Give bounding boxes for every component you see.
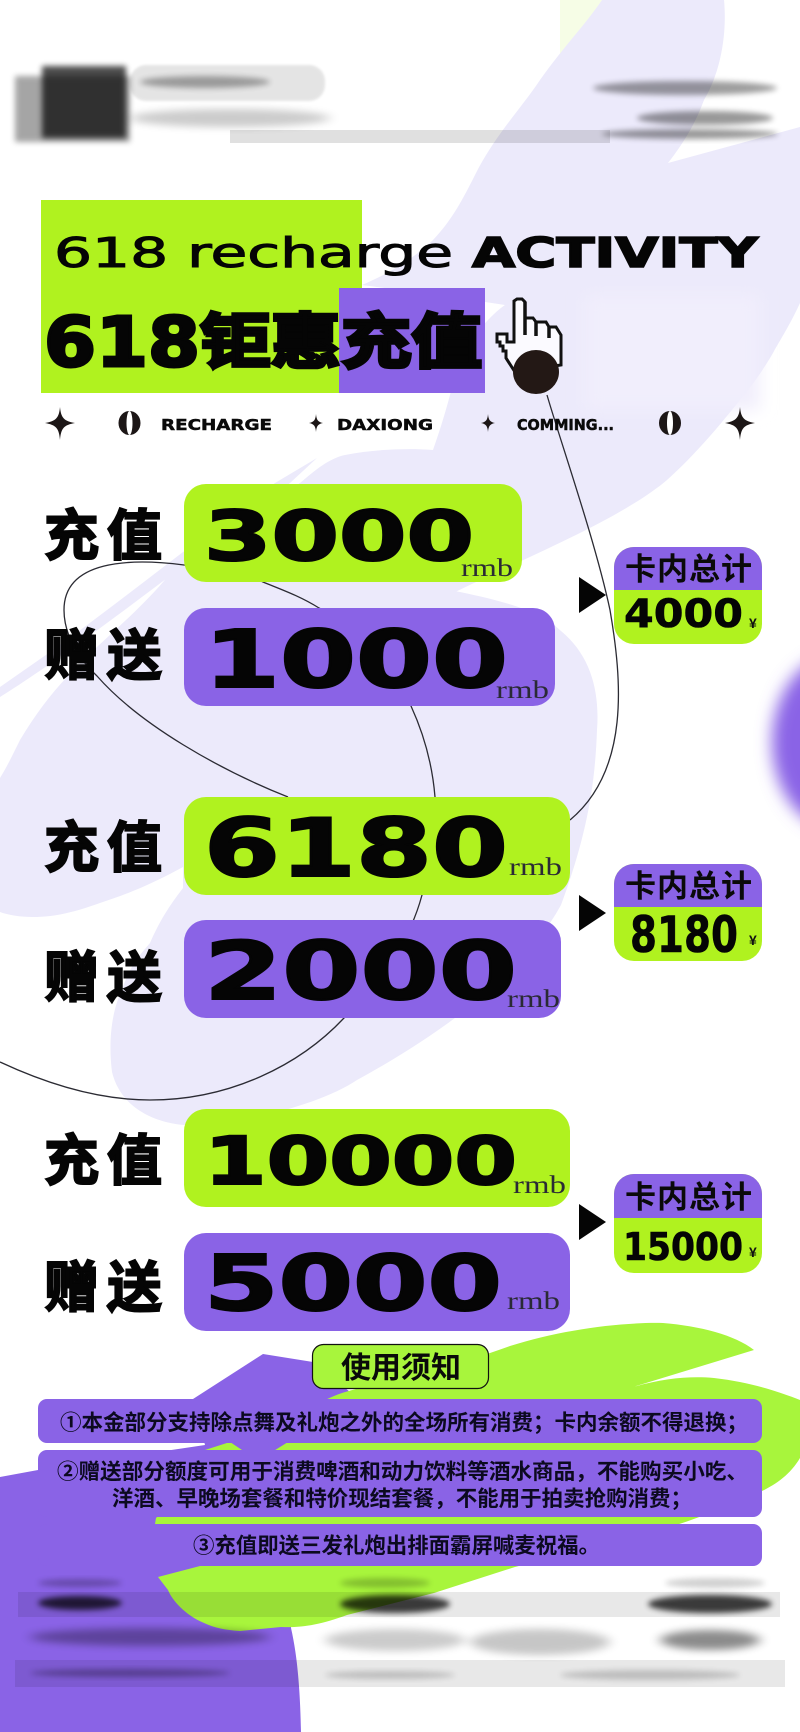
arrow 1 xyxy=(579,577,606,613)
row 3: recharge 6180 xyxy=(44,797,570,895)
unit: rmb xyxy=(507,1288,560,1315)
background: faint green sliver xyxy=(560,0,602,70)
row 1: recharge 3000 xyxy=(44,484,522,582)
card body xyxy=(614,1174,762,1273)
thin curved lines xyxy=(0,395,618,1100)
label: 赠送 xyxy=(44,625,162,687)
background: soft light glow near cursor xyxy=(585,295,760,410)
background: purple blob bottom left xyxy=(0,1354,360,1732)
label: 充值 xyxy=(44,817,162,879)
title chinese: 钜惠充值: 钜惠充值 xyxy=(200,309,482,376)
icon: sparkle right xyxy=(725,407,755,440)
bar xyxy=(38,1450,762,1517)
label: COMMING: COMMING... xyxy=(517,416,614,434)
amount: 1000 xyxy=(204,614,508,706)
purple notch over green xyxy=(230,1442,288,1452)
text: ①本金部分支持除点舞及礼炮之外的全场所有消费；卡内余额不得退换； xyxy=(60,1410,748,1435)
green box xyxy=(184,484,522,582)
label: 赠送 xyxy=(44,947,162,1009)
title purple panel xyxy=(339,288,485,393)
purple box xyxy=(184,920,561,1018)
total amount: 15000 xyxy=(623,1225,743,1269)
row 5: recharge 10000 xyxy=(44,1109,570,1207)
notice heading xyxy=(312,1344,488,1388)
label: 充值 xyxy=(44,505,162,567)
green box xyxy=(184,1109,570,1207)
total amount: 8180 xyxy=(630,906,738,964)
amount: 10000 xyxy=(204,1123,517,1200)
row 2: gift 1000 xyxy=(44,608,555,706)
unit: rmb xyxy=(509,854,562,881)
currency: ¥ xyxy=(749,932,757,948)
header text: 卡内总计 xyxy=(625,552,752,587)
notice bar 3 xyxy=(38,1524,762,1566)
card header xyxy=(614,547,762,590)
title english line: ACTIVITY: ACTIVITY xyxy=(472,229,760,277)
label: RECHARGE: RECHARGE xyxy=(161,416,272,434)
total amount: 4000 xyxy=(624,592,743,637)
unit: rmb xyxy=(461,555,513,582)
card body xyxy=(614,864,762,961)
decorative row: recharge daxiong comming xyxy=(45,407,755,440)
blurred footer xyxy=(15,1578,785,1687)
label: DAXIONG: DAXIONG xyxy=(337,416,433,434)
row 6: gift 5000 xyxy=(44,1233,570,1331)
text line 1: ②赠送部分额度可用于消费啤酒和动力饮料等酒水商品，不能购买小吃、 xyxy=(57,1460,748,1484)
icon: small sparkle middle xyxy=(481,414,495,432)
header text: 卡内总计 xyxy=(625,869,752,904)
bar xyxy=(38,1399,762,1443)
unit: rmb xyxy=(496,677,549,704)
row 4: gift 2000 xyxy=(44,920,561,1018)
amount: 6180 xyxy=(204,802,508,895)
bar xyxy=(38,1524,762,1566)
icon: split oval right xyxy=(659,411,681,435)
background: green blob bottom xyxy=(155,1323,800,1631)
currency: ¥ xyxy=(749,615,757,631)
card header xyxy=(614,864,762,907)
card header xyxy=(614,1174,762,1218)
total card 3 xyxy=(614,1174,762,1273)
title green panel xyxy=(41,200,362,393)
currency: ¥ xyxy=(749,1244,757,1260)
total card 2 xyxy=(614,864,762,964)
heading text: 使用须知 xyxy=(341,1352,461,1385)
title block xyxy=(41,200,760,393)
background: purple blurred circle on right edge xyxy=(772,654,800,830)
amount: 3000 xyxy=(204,497,474,577)
total card 1 xyxy=(614,547,762,644)
title number 618: 618 xyxy=(44,303,200,383)
title english line: 618 recharge: 618 recharge xyxy=(54,229,453,277)
icon: split oval left xyxy=(118,411,140,435)
purple box xyxy=(184,608,555,706)
text: ③充值即送三发礼炮出排面霸屏喊麦祝福。 xyxy=(193,1534,600,1558)
icon: small sparkle xyxy=(309,414,323,432)
label: 充值 xyxy=(44,1130,162,1192)
icon: pixel hand cursor xyxy=(497,299,561,394)
icon: sparkle left xyxy=(45,407,75,440)
card body xyxy=(614,547,762,644)
arrow 3 xyxy=(579,1204,606,1240)
header text: 卡内总计 xyxy=(625,1180,752,1215)
amount: 5000 xyxy=(204,1240,502,1329)
arrow 2 xyxy=(579,895,606,931)
amount: 2000 xyxy=(204,925,517,1018)
blurred header: right text xyxy=(593,81,778,139)
label: 赠送 xyxy=(44,1257,162,1319)
heading box xyxy=(312,1344,488,1388)
text line 2: 洋酒、早晚场套餐和特价现结套餐，不能用于拍卖抢购消费； xyxy=(112,1486,692,1511)
purple box xyxy=(184,1233,570,1331)
unit: rmb xyxy=(507,986,560,1013)
notice bar 1 xyxy=(38,1399,762,1443)
blurred header: left logo and text xyxy=(15,65,610,143)
notice bar 2 xyxy=(38,1450,762,1517)
background: lavender shapes xyxy=(0,0,800,1125)
green box xyxy=(184,797,570,895)
unit: rmb xyxy=(513,1172,566,1199)
